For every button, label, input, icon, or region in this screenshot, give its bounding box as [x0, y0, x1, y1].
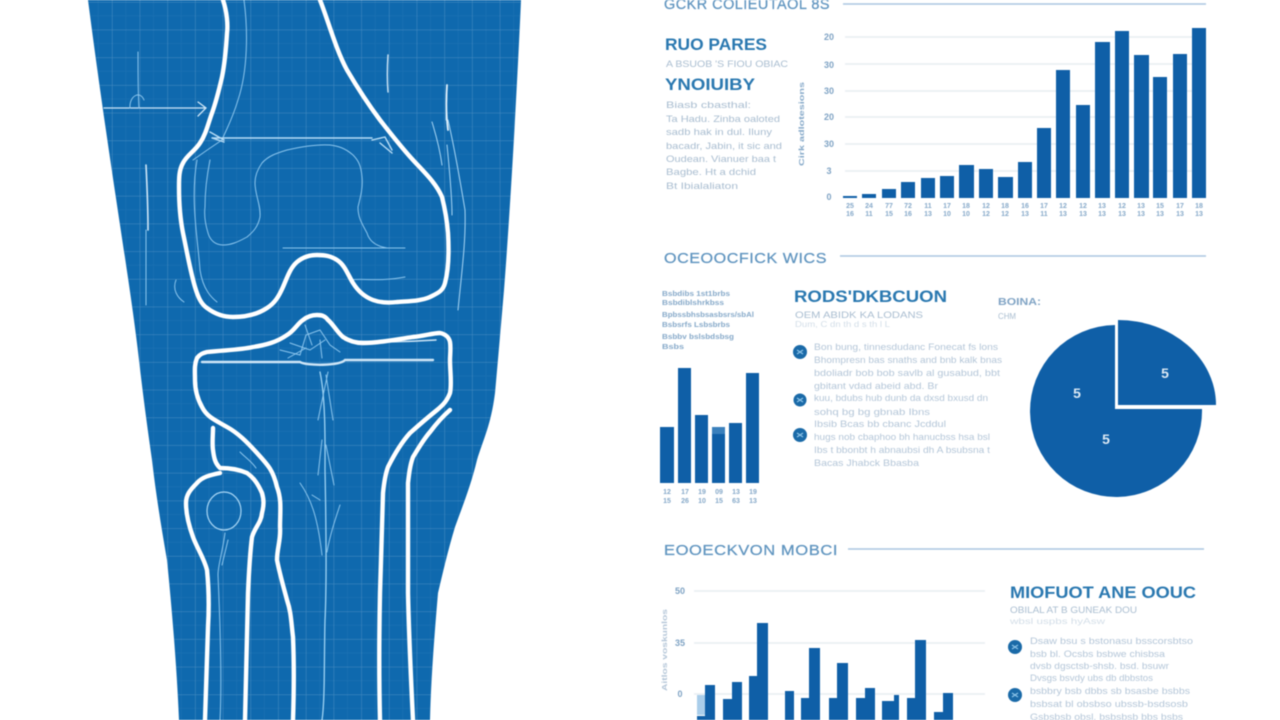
bullet text: bsb bl. Ocsbs bsbwe chisbsa: [1030, 649, 1166, 660]
x axis labels: 15: [885, 211, 893, 218]
pie values: [1073, 365, 1169, 447]
body text: bacadr, Jabin, it sic and: [666, 141, 782, 152]
legend: BOINA:: [998, 297, 1041, 308]
x axis labels: 12: [982, 211, 990, 218]
heading: RUO PARES: [665, 35, 767, 54]
x axis labels: 19: [698, 489, 706, 496]
x axis labels: 13: [732, 489, 740, 496]
pie values: 5: [1161, 365, 1169, 381]
bullet text: Bacas Jhabck Bbasba: [814, 458, 920, 469]
y axis labels: 30: [824, 139, 834, 149]
bullet text: bsbsat bl obsbso ubssb-bsdsosb: [1030, 699, 1188, 710]
x axis labels: [846, 203, 1203, 218]
x axis labels: 11: [924, 203, 932, 210]
y axis labels: 20: [824, 112, 834, 122]
body text: Biasb cbasthal:: [666, 100, 751, 111]
x axis labels: 16: [1021, 203, 1029, 210]
tibia lateral edge: [408, 410, 450, 720]
heading 2: YNOIUIBY: [665, 75, 756, 94]
text block: bottom: [1008, 583, 1196, 720]
x axis labels: 17: [681, 489, 689, 496]
small chart notes: [662, 291, 754, 351]
main slice: [1030, 325, 1202, 497]
y axis labels: 50: [675, 586, 685, 596]
x axis labels: 13: [1156, 211, 1164, 218]
x axis labels: 13: [1098, 211, 1106, 218]
x axis labels: 63: [732, 498, 740, 505]
x axis labels: 17: [943, 203, 951, 210]
bullet text: gbitant vdad abeid abd. Br: [814, 381, 938, 392]
x axis labels: 13: [749, 498, 757, 505]
x axis labels: 18: [1195, 203, 1203, 210]
x axis labels: 13: [1079, 211, 1087, 218]
x axis labels: 15: [663, 498, 671, 505]
x axis labels: 26: [681, 498, 689, 505]
bars: [697, 623, 953, 720]
y axis labels: 0: [677, 689, 683, 699]
sketch annotations: [104, 0, 465, 720]
bullet text: bdoliadr bob bob savlb al gusabud, bbt: [814, 368, 1000, 379]
x axis labels: 12: [1079, 203, 1087, 210]
small chart notes: Bsbdibs 1st1brbs: [662, 291, 730, 298]
leg silhouette: [88, 0, 521, 720]
bullet text: [814, 342, 1002, 469]
y axis labels: [824, 32, 834, 202]
x axis labels: 17: [1040, 203, 1048, 210]
bullet text: Ibs t bbonbt h abnaubsi dh A bsubsna t: [814, 445, 990, 456]
bullet icons: [1008, 640, 1022, 702]
text block: bottom: wbsl uspbs hyAsw: [1009, 617, 1105, 626]
small chart notes: Bpbssbhsbsasbsrs/sbAl: [662, 312, 754, 319]
x axis labels: 16: [904, 211, 912, 218]
pie values: 5: [1073, 385, 1081, 401]
x axis labels: 13: [1137, 211, 1145, 218]
tibia outline: [195, 315, 451, 720]
y axis labels: 20: [824, 32, 834, 42]
bullet icons: [793, 345, 807, 442]
bullet text: kuu, bdubs hub dunb da dxsd bxusd dn: [814, 393, 988, 404]
body text: [666, 100, 782, 192]
heading: MIOFUOT ANE OOUC: [1010, 583, 1196, 602]
y axis labels: 0: [826, 192, 832, 202]
bar chart: top: [799, 28, 1206, 218]
x axis labels: 13: [1098, 203, 1106, 210]
x axis labels: 15: [715, 498, 723, 505]
fibula head circle: [207, 492, 241, 530]
x axis labels: 13: [924, 211, 932, 218]
grid lines: [694, 591, 985, 694]
x axis labels: 12: [1001, 211, 1009, 218]
bars: [843, 28, 1206, 198]
bar chart: middle: [660, 368, 759, 505]
bars: [660, 368, 759, 483]
pie values: 5: [1102, 431, 1110, 447]
x axis labels: 17: [1176, 203, 1184, 210]
x axis labels: 12: [1118, 203, 1126, 210]
femur outline: [179, 0, 449, 317]
bullet text: Bon bung, tinnesdudanc Fonecat fs lons: [814, 342, 998, 353]
body text: Oudean. Vianuer baa t: [666, 154, 776, 165]
blueprint grid: [88, 0, 521, 720]
panel: knee blueprint: [88, 0, 521, 720]
section heading: middle: OCEOOCFICK WICS: [664, 250, 827, 267]
x axis labels: 15: [1156, 203, 1164, 210]
y axis labels: 35: [675, 638, 685, 648]
x axis labels: 10: [962, 211, 970, 218]
tibial plateau sketch: [202, 325, 436, 365]
y axis labels: 30: [824, 86, 834, 96]
bullet text: Dvsgs bsvdy ubs db dbbstos: [1030, 673, 1153, 684]
body text: Ta Hadu. Zinba oaloted: [666, 114, 780, 125]
small chart notes: Bsbbv bslsbdsbsg: [662, 334, 734, 341]
small chart notes: Bsbdiblshrkbss: [662, 300, 724, 307]
x axis labels: 11: [1040, 211, 1048, 218]
grid lines: [845, 37, 1206, 171]
bullet text: bsbbry bsb dbbs sb bsasbe bsbbs: [1030, 686, 1190, 697]
x axis labels: 77: [885, 203, 893, 210]
pie chart: [998, 297, 1216, 497]
body text: Bagbe. Ht a dchid: [666, 167, 756, 178]
x axis labels: [663, 489, 757, 505]
x axis labels: 11: [865, 211, 873, 218]
x axis labels: 12: [1059, 203, 1067, 210]
bullet text: Bhompresn bas snaths and bnb kalk bnas: [814, 355, 1002, 366]
x axis labels: 24: [865, 203, 873, 210]
y axis labels: 30: [824, 60, 834, 70]
heading: RODS'DKBCUON: [794, 287, 947, 306]
subheading: A BSUOB 'S FIOU OBIAC: [666, 59, 788, 70]
x axis labels: 18: [962, 203, 970, 210]
text block: middle: [793, 287, 1002, 469]
x axis labels: 10: [943, 211, 951, 218]
text block: middle: Dum, C dn th d s th l L: [795, 320, 891, 329]
bar chart: bottom: [662, 586, 985, 720]
bullet text: Dsaw bsu s bstonasu bsscorsbtso: [1030, 636, 1193, 647]
x axis labels: 13: [1118, 211, 1126, 218]
bullet text: [1030, 636, 1193, 720]
bullet text: dvsb dgsctsb-shsb. bsd. bsuwr: [1030, 661, 1169, 672]
top right slice: [1118, 320, 1216, 405]
x axis labels: 13: [1137, 203, 1145, 210]
y axis title: Cirk adlotesions: [799, 82, 806, 166]
bullet text: sohq bg bg gbnab Ibns: [814, 407, 930, 418]
x axis labels: 19: [749, 489, 757, 496]
x axis labels: 13: [1195, 211, 1203, 218]
subheading: OEM ABIDK KA LODANS: [795, 310, 923, 321]
bullet text: Ibsib Bcas bb cbanc Jcddul: [814, 419, 946, 430]
fibula outline: [186, 428, 264, 720]
body text: sadb hak in dul. Iluny: [666, 127, 772, 138]
x axis labels: 25: [846, 203, 854, 210]
y axis title: Aitlos voskunlos: [662, 609, 669, 691]
small chart notes: Bsbsrfs Lsbsbrbs: [662, 322, 730, 329]
x axis labels: 72: [904, 203, 912, 210]
x axis labels: 12: [982, 203, 990, 210]
x axis labels: 10: [698, 498, 706, 505]
subheading: OBILAL AT B GUNEAK DOU: [1010, 605, 1137, 616]
x axis labels: 16: [846, 211, 854, 218]
x axis labels: 13: [1176, 211, 1184, 218]
x axis labels: 13: [1021, 211, 1029, 218]
body text: Bt Ibialaliaton: [666, 181, 738, 192]
y axis labels: 3: [826, 166, 832, 176]
section heading: bottom: EOOECKVON MOBCI: [664, 542, 838, 559]
text block: top left: [665, 35, 788, 192]
pie chart: CHM: [998, 312, 1016, 321]
y axis labels: [675, 586, 685, 699]
x axis labels: 13: [1059, 211, 1067, 218]
small chart notes: Bsbs: [662, 344, 684, 351]
bullet text: hugs nob cbaphoo bh hanucbss hsa bsl: [814, 432, 990, 443]
x axis labels: 09: [715, 489, 723, 496]
x axis labels: 12: [663, 489, 671, 496]
x axis labels: 18: [1001, 203, 1009, 210]
